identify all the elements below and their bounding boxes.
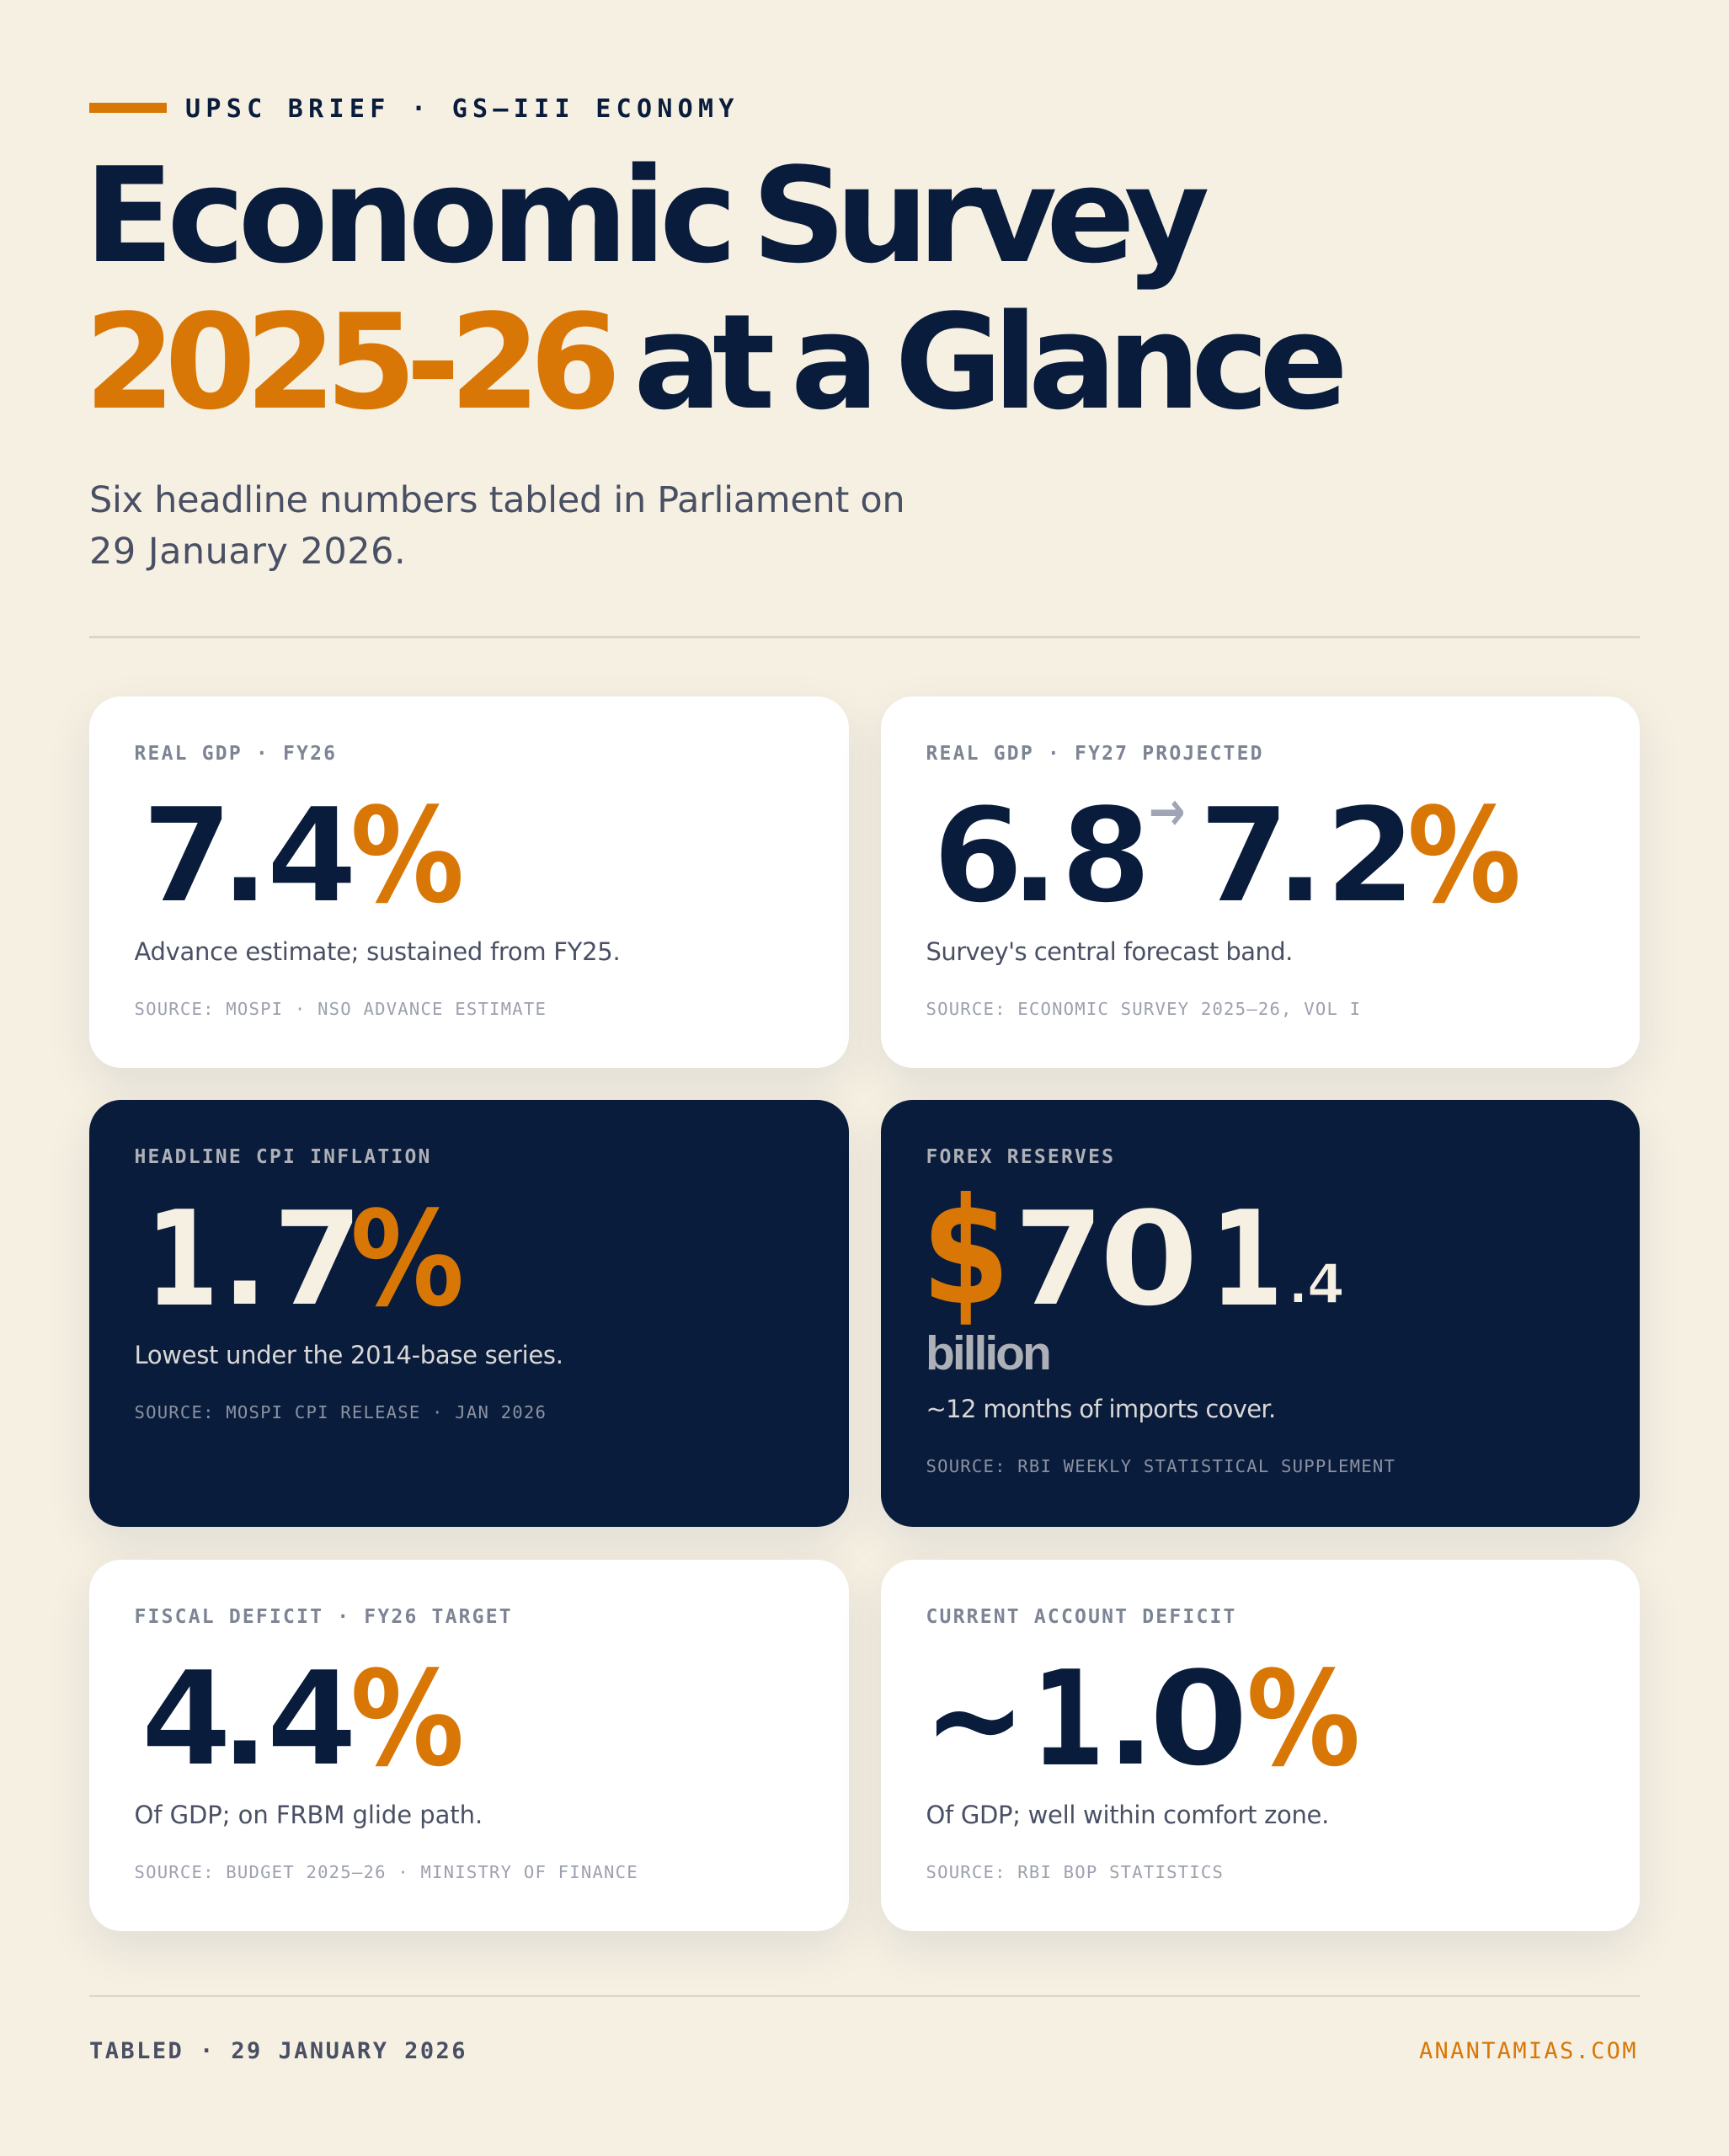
value 7.4%: 4 [266,779,358,932]
label: FISCAL DEFICIT · FY26 TARGET [135,1606,513,1628]
value 7.4%: . [220,779,269,932]
value $701.4: .4 [1288,1253,1343,1316]
value 6.8 to 7.2%: 8 [1060,779,1152,932]
description: Advance estimate; sustained from FY25. [135,937,620,966]
description: Survey's central forecast band. [926,937,1293,966]
description: Of GDP; well within comfort zone. [926,1801,1329,1829]
panel: forex reserves [881,1100,1640,1527]
panel: real GDP FY27 projected [881,696,1640,1068]
panel: headline CPI inflation [89,1100,849,1527]
panel: current account deficit [881,1560,1640,1931]
value 4.4%: 4 [266,1642,358,1796]
title line 2: 2025-26 at a Glance [84,286,1339,439]
value $701.4 [921,1167,1343,1338]
value ~1.0%: . [1106,1642,1155,1796]
divider [89,636,1640,638]
subtitle: Six headline numbers tabled in Parliament on [89,479,905,521]
label: CURRENT ACCOUNT DEFICIT [926,1606,1237,1628]
value ~1.0% [924,1642,1360,1796]
value 7.4%: 7 [141,779,233,932]
value $701.4: 0 [1099,1182,1199,1336]
value 4.4%: . [220,1642,269,1796]
value 7.4%: % [350,779,464,932]
description: Of GDP; on FRBM glide path. [135,1801,483,1829]
value ~1.0%: ~ [924,1642,1026,1796]
value 1.7%: 7 [272,1182,364,1336]
value $701.4: $ [921,1167,1010,1338]
value 1.7% [146,1182,464,1336]
label: HEADLINE CPI INFLATION [135,1146,432,1168]
value $701.4: 7 [1013,1182,1105,1336]
footer date: TABLED · 29 JANUARY 2026 [89,2038,467,2064]
subtitle [89,479,905,573]
source: SOURCE: BUDGET 2025–26 · MINISTRY OF FINANCE [135,1862,638,1882]
value 6.8 to 7.2%: 2 [1325,779,1417,932]
value ~1.0%: 0 [1149,1642,1249,1796]
source: SOURCE: MOSPI · NSO ADVANCE ESTIMATE [135,999,547,1019]
value 4.4%: 4 [141,1642,232,1796]
source: SOURCE: ECONOMIC SURVEY 2025–26, VOL I [926,999,1361,1019]
panel: fiscal deficit [89,1560,849,1931]
value ~1.0%: 1 [1032,1642,1105,1796]
description: Lowest under the 2014-base series. [135,1341,563,1369]
label: REAL GDP · FY27 PROJECTED [926,743,1264,765]
value 6.8 to 7.2%: 7 [1198,779,1290,932]
value 1.7%: 1 [146,1182,219,1336]
unit billion: billion [926,1326,1049,1380]
title line 1: Economic Survey [84,139,1198,292]
source: SOURCE: MOSPI CPI RELEASE · JAN 2026 [135,1402,547,1422]
label: FOREX RESERVES [926,1146,1115,1168]
eyebrow: UPSC BRIEF · GS–III ECONOMY [185,94,739,124]
arrow: → [1149,780,1186,844]
value 4.4%: % [350,1642,464,1796]
value 6.8 to 7.2%: % [1407,779,1521,932]
label: REAL GDP · FY26 [135,743,337,765]
value 1.7%: % [350,1182,464,1336]
value 1.7%: . [220,1182,269,1336]
eyebrow accent bar [89,103,167,113]
value 6.8 to 7.2%: 6 [932,779,1024,932]
value ~1.0%: % [1246,1642,1360,1796]
description: ~12 months of imports cover. [926,1395,1276,1423]
footer rule [89,1995,1640,1997]
panel: real GDP FY26 [89,696,849,1068]
value 7.4% [141,779,464,932]
subtitle: 29 January 2026. [89,531,406,573]
value 6.8 to 7.2%: . [1275,779,1325,932]
value 6.8 to 7.2% [932,779,1521,932]
value $701.4: 1 [1210,1182,1283,1336]
source: SOURCE: RBI BOP STATISTICS [926,1862,1224,1882]
source: SOURCE: RBI WEEKLY STATISTICAL SUPPLEMENT [926,1456,1395,1476]
footer site: ANANTAMIAS.COM [1419,2038,1638,2064]
value 4.4% [141,1642,464,1796]
value 6.8 to 7.2%: . [1010,779,1059,932]
